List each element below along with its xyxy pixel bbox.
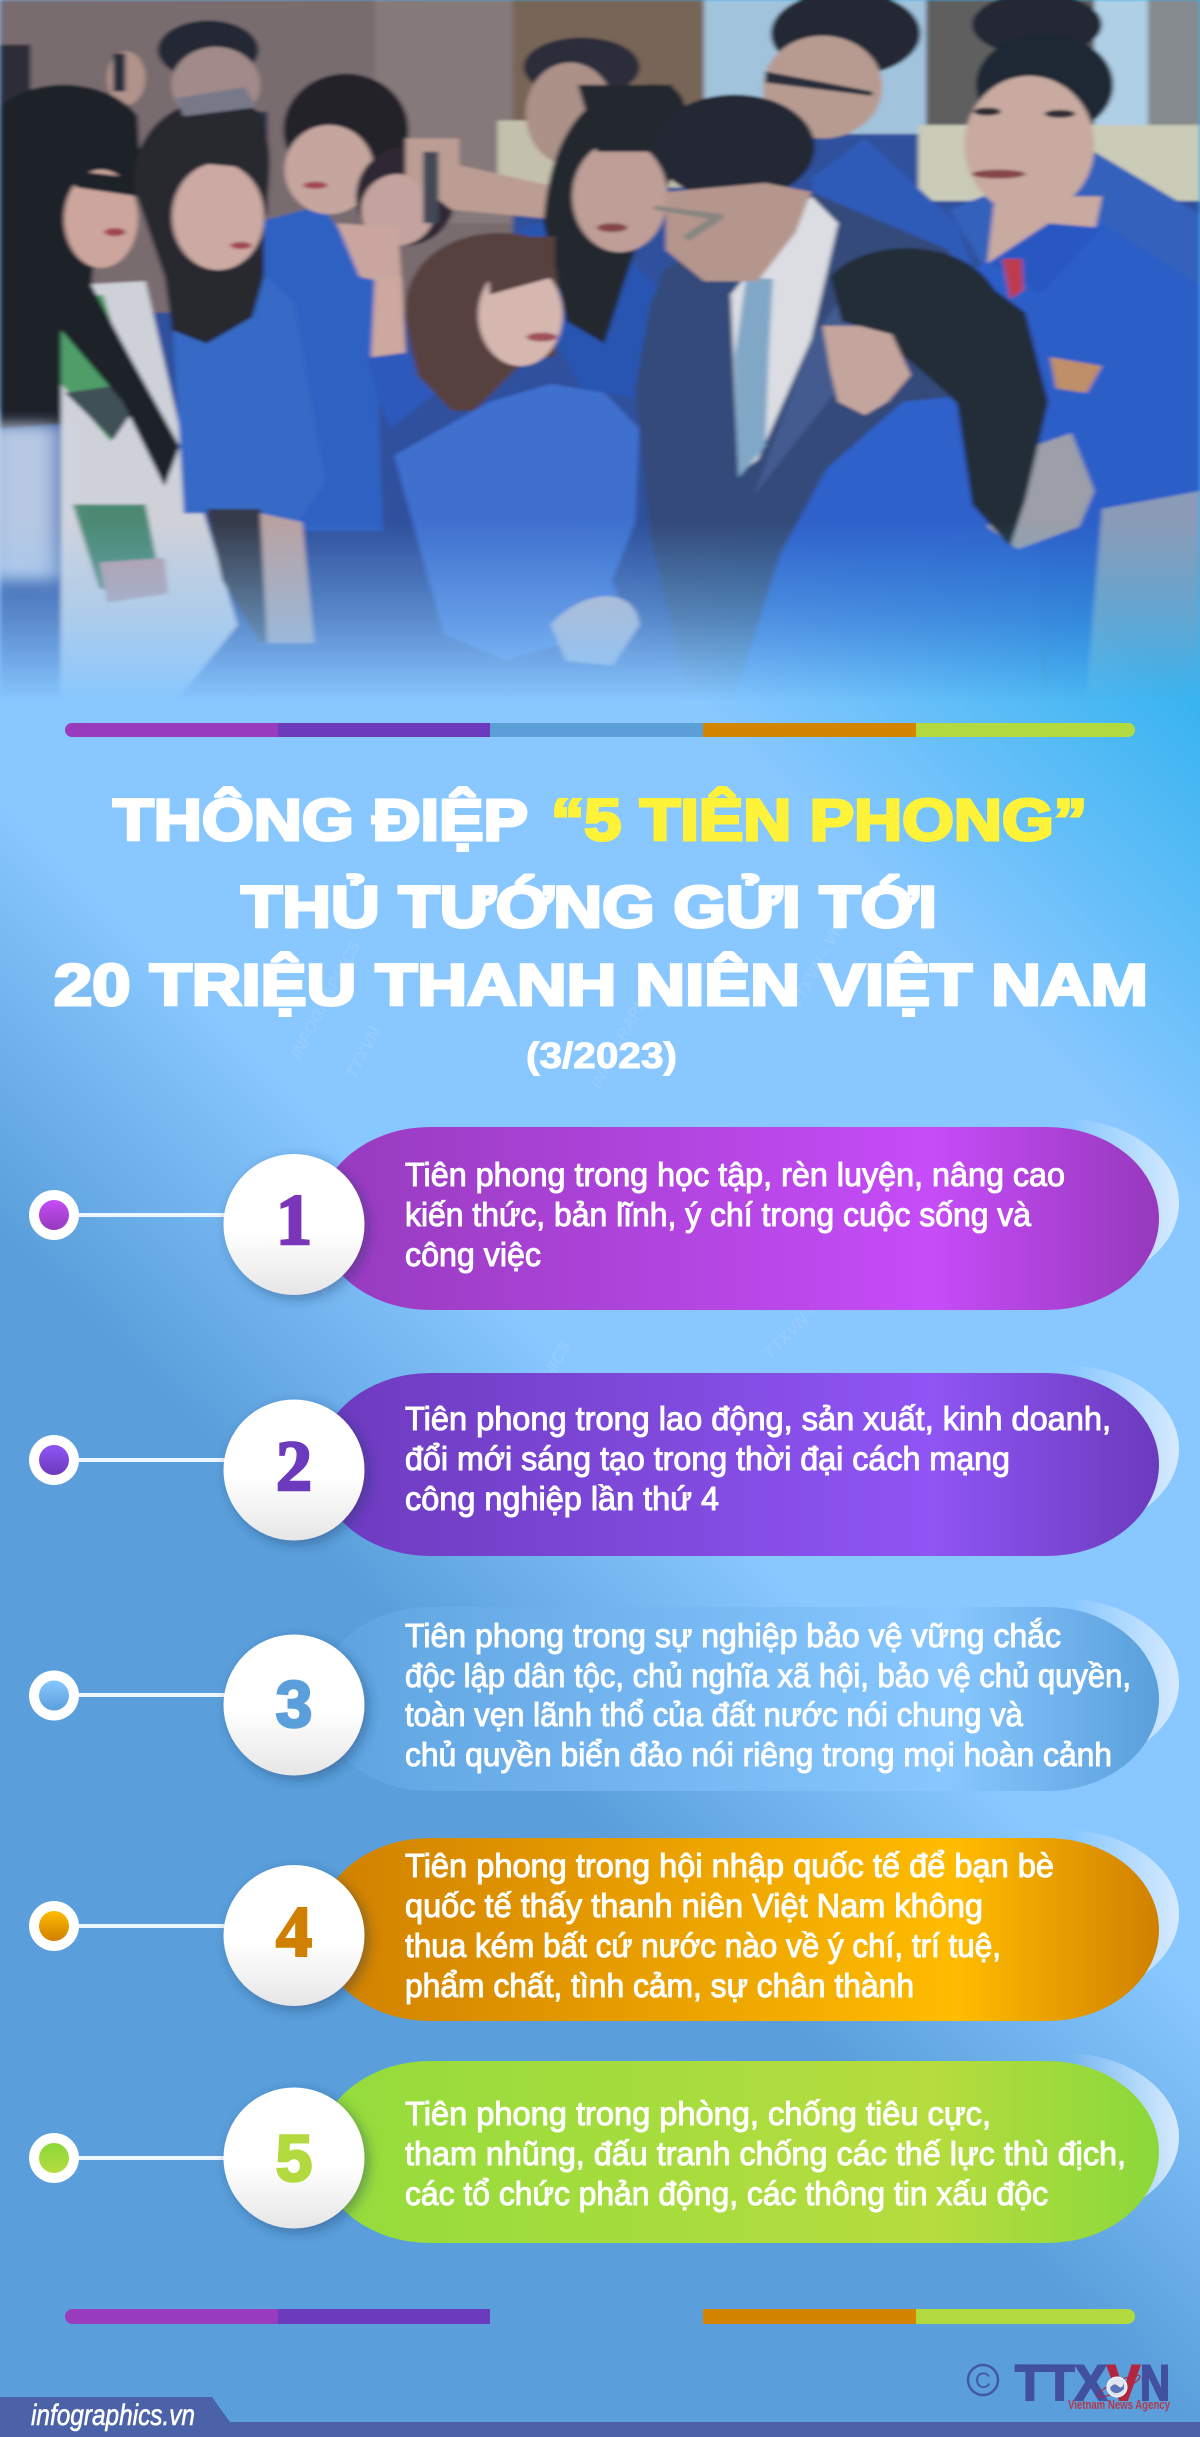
number badge 2 (224, 1400, 364, 1540)
text 3: Tiên phong trong sự nghiệp bảo vệ vững chắc (405, 1617, 1061, 1654)
TTXVN logo (1015, 2355, 1171, 2412)
centre woman hair and face (405, 233, 558, 411)
glasses man (771, 0, 921, 76)
pill 1 (318, 1127, 1159, 1310)
title (54, 788, 1148, 1076)
watermarks: INFOGRAPHICS (587, 967, 665, 1092)
connector dot 2 (29, 1435, 225, 1485)
text 1: công việc (405, 1236, 541, 1273)
back man left (158, 21, 259, 79)
watermarks: TTXVN - VNA (787, 909, 854, 1012)
PM suit (635, 192, 1071, 700)
number badge 4 (224, 1865, 364, 2006)
pill 3 (318, 1607, 1159, 1791)
crescent 4 (700, 1830, 1179, 1998)
text 2: công nghiệp lần thứ 4 (405, 1480, 719, 1517)
text 4: quốc tế thấy thanh niên Việt Nam không (405, 1887, 983, 1924)
top colour bar (65, 723, 1135, 737)
text 3: độc lập dân tộc, chủ nghĩa xã hội, bảo vệ chủ quyền, (405, 1657, 1131, 1694)
crescent 5 (700, 2053, 1179, 2221)
number badge 2: 2 (276, 1426, 312, 1506)
footer band (0, 2397, 1200, 2437)
front girl (735, 397, 1041, 700)
text 4: Tiên phong trong hội nhập quốc tế để bạn bè (405, 1847, 1054, 1884)
watermarks: INFOGRAPHICS (287, 937, 365, 1062)
number badge 5: 5 (276, 2121, 312, 2195)
crescent 1 (700, 1119, 1179, 1287)
left woman hair (0, 85, 180, 487)
connector dot 1 (29, 1190, 225, 1240)
TTXVN logo: N (1140, 2355, 1170, 2411)
PM head (667, 93, 818, 191)
text 5: tham nhũng, đấu tranh chống các thế lực thù địch, (405, 2135, 1126, 2172)
text 4 (405, 1847, 1054, 2004)
far right back man (972, 0, 1102, 56)
left woman cardigan (61, 281, 237, 700)
item 2 (29, 1365, 1179, 1556)
number badge 3: 3 (276, 1667, 312, 1741)
second woman hair and face (134, 100, 270, 344)
connector dot 3 (29, 1670, 225, 1720)
item 1 (29, 1119, 1179, 1310)
watermarks: TTXVN - VNA (259, 1449, 342, 1543)
watermarks (259, 909, 905, 1543)
text 5: Tiên phong trong phòng, chống tiêu cực, (405, 2095, 991, 2132)
watermarks: INFOGRAPHICS (732, 1137, 810, 1262)
item 5 (29, 2053, 1179, 2243)
number badge 1: 1 (276, 1180, 312, 1260)
woman behind PM (520, 223, 658, 398)
text 3 (405, 1617, 1131, 1773)
text 3: chủ quyền biển đảo nói riêng trong mọi hoàn cảnh (405, 1736, 1112, 1773)
text 2 (405, 1400, 1111, 1517)
second woman shirt (172, 263, 325, 522)
pill 4 (318, 1838, 1159, 2021)
connector dot 4 (29, 1901, 225, 1951)
text 4: thua kém bất cứ nước nào về ý chí, trí tuệ, (405, 1927, 1001, 1964)
TTXVN logo: TTX (1015, 2355, 1107, 2411)
title: 20 TRIỆU THANH NIÊN VIỆT NAM (54, 953, 1148, 1018)
title: (3/2023) (526, 1035, 677, 1076)
TTXVN logo: V (1107, 2355, 1141, 2411)
footer site name: infographics.vn (31, 2399, 195, 2432)
girl covered face (356, 147, 455, 246)
watermarks: TTXVN - VNA (517, 1169, 584, 1272)
text 2: Tiên phong trong lao động, sản xuất, kinh doanh, (405, 1400, 1111, 1437)
number badge 1 (224, 1154, 364, 1295)
text 1 (405, 1156, 1065, 1273)
title: THỦ TƯỚNG GỬI TỚI (241, 875, 937, 940)
raising arm (406, 138, 559, 219)
text 5: các tổ chức phản động, các thông tin xấu độc (405, 2175, 1048, 2212)
header photo: youth union members with the Prime Minister (0, 0, 1200, 705)
back man centre (522, 36, 642, 87)
watermarks: INFOGRAPHICS (312, 1172, 390, 1297)
number badge 5 (224, 2088, 364, 2228)
text 2: đổi mới sáng tạo trong thời đại cách mạng (405, 1440, 1010, 1477)
text 3: toàn vẹn lãnh thổ của đất nước nói chung và (405, 1696, 1024, 1733)
item 4 (29, 1830, 1179, 2021)
text 1: kiến thức, bản lĩnh, ý chí trong cuộc sống và (405, 1196, 1032, 1233)
right man (972, 214, 1200, 700)
crescent 3 (700, 1599, 1179, 1767)
text 4: phẩm chất, tình cảm, sự chân thành (405, 1967, 914, 2004)
title: “5 TIÊN PHONG” (551, 788, 1087, 853)
centre woman shirt (394, 384, 639, 661)
number badge 4: 4 (276, 1892, 312, 1972)
number badge 3 (224, 1634, 364, 1776)
connector dot 5 (29, 2133, 225, 2183)
pill 5 (318, 2061, 1159, 2243)
phone hand left (107, 51, 145, 105)
watermarks: INFOGRAPHICS (827, 1407, 905, 1532)
bottom colour bar (65, 2309, 1135, 2324)
copyright symbol: C (975, 2368, 991, 2393)
copyright symbol (968, 2365, 998, 2395)
watermarks: TTXVN - VNA (759, 1274, 848, 1363)
crescent 2 (700, 1365, 1179, 1533)
pill 2 (318, 1373, 1159, 1556)
white blotch at left edge (0, 424, 61, 580)
title: THÔNG ĐIỆP (113, 788, 528, 853)
text 1: Tiên phong trong học tập, rèn luyện, nâng cao (405, 1156, 1065, 1193)
text 5 (405, 2095, 1126, 2212)
third woman (253, 205, 383, 531)
item 3 (29, 1599, 1179, 1791)
watermarks: INFOGRAPHICS (497, 1337, 575, 1462)
watermarks: TTXVN (342, 1023, 385, 1082)
